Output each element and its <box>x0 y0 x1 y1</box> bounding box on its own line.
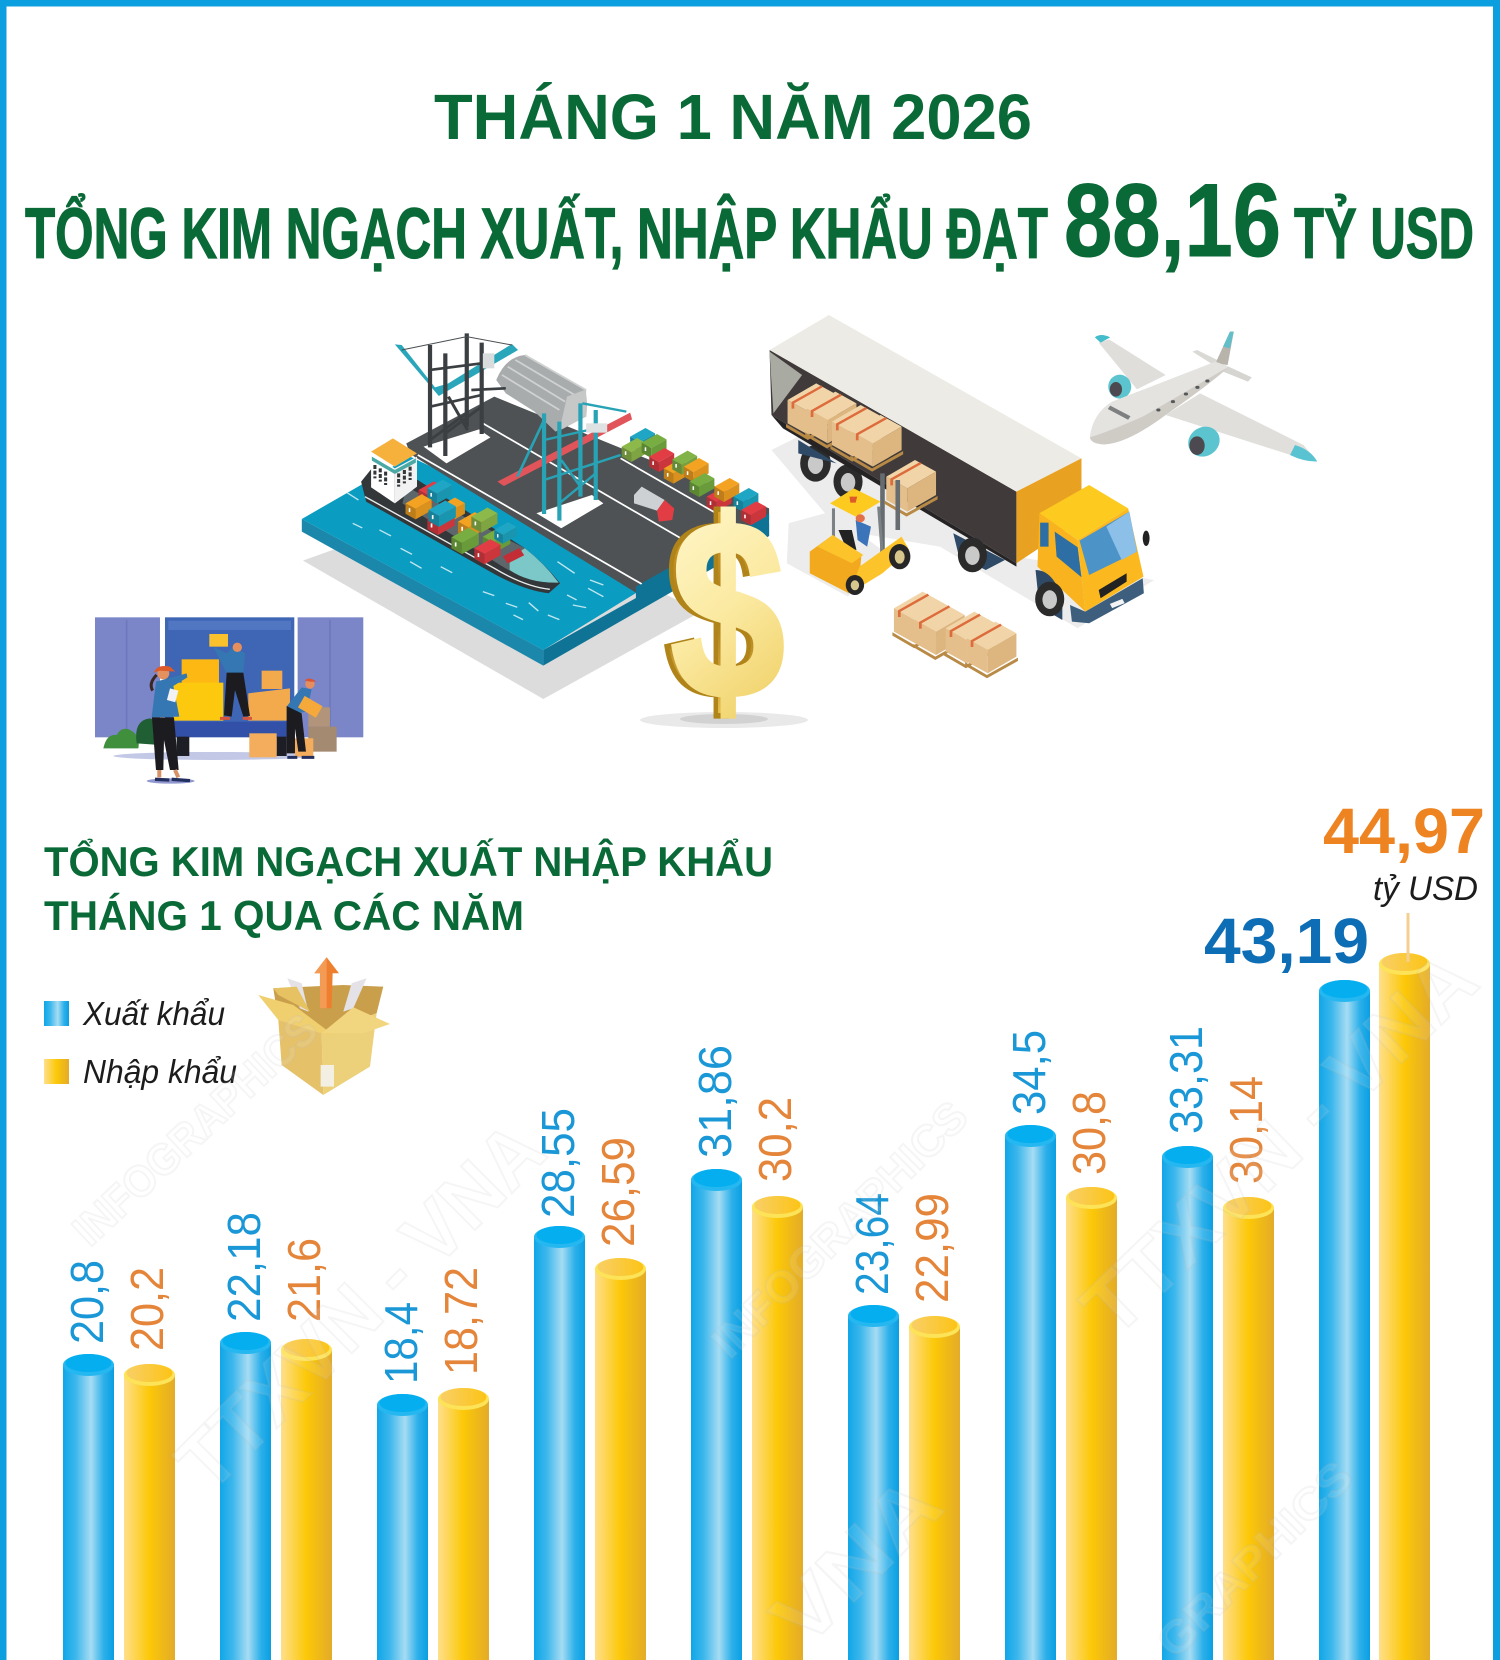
connector line <box>1406 913 1410 962</box>
bar chart <box>61 795 1485 1660</box>
dark crane <box>424 429 490 463</box>
icon: gold dollar sign: $ <box>664 468 777 751</box>
year group 3 <box>375 1267 489 1660</box>
legend swatch: export <box>44 1001 69 1026</box>
watermark: VNA <box>754 1459 958 1660</box>
heading line 1: TỔNG KIM NGẠCH XUẤT NHẬP KHẨU <box>44 836 773 885</box>
export value: 22,18 <box>218 1212 270 1322</box>
red boom and teal crane <box>497 413 632 486</box>
year group 4 <box>532 1108 646 1660</box>
watermark: TTXVN - VNA <box>1065 934 1494 1352</box>
export value: 28,55 <box>532 1108 584 1218</box>
import value: 22,99 <box>906 1193 958 1303</box>
year group 7 <box>1003 1030 1117 1660</box>
front rear wheel <box>953 533 1005 570</box>
cargo <box>786 383 839 440</box>
import value: 30,14 <box>1220 1076 1272 1184</box>
year group 2 <box>218 1212 332 1660</box>
man on truck <box>209 634 228 647</box>
export bar <box>377 1394 428 1660</box>
watermark <box>63 934 1494 1660</box>
export value: 31,86 <box>689 1045 741 1158</box>
export bar <box>848 1305 899 1660</box>
year group 5 <box>689 1045 803 1660</box>
illustration: workers unloading truck <box>95 617 363 784</box>
export bar <box>534 1226 585 1660</box>
export value: 33,31 <box>1160 1026 1212 1134</box>
man right <box>305 679 315 689</box>
import value: 18,72 <box>435 1267 487 1375</box>
shore containers <box>630 428 655 452</box>
watermark: INFOGRAPHICS <box>63 1005 327 1255</box>
chart heading <box>44 836 773 939</box>
cab <box>1039 485 1128 540</box>
import bar <box>752 1196 803 1660</box>
legend label: export: Xuất khẩu <box>82 995 225 1032</box>
import bar <box>1379 953 1430 1660</box>
icon: gold dollar sign <box>640 468 808 751</box>
import value: 21,6 <box>278 1238 330 1322</box>
legend <box>44 995 237 1090</box>
export bar <box>1162 1146 1213 1660</box>
import bar <box>438 1388 489 1660</box>
import bar <box>909 1316 960 1660</box>
watermark: INFOGRAPHICS <box>702 1092 977 1367</box>
boxes <box>182 659 219 683</box>
import bar <box>1223 1197 1274 1660</box>
hangar <box>496 355 587 432</box>
export bar <box>1005 1125 1056 1660</box>
import bar <box>124 1364 175 1660</box>
icon: open cardboard box <box>258 957 390 1095</box>
export value: 23,64 <box>846 1193 898 1295</box>
icon: gold dollar sign: $ <box>671 468 784 751</box>
import value: 30,2 <box>749 1097 801 1182</box>
import value: 20,2 <box>121 1267 173 1351</box>
export value: 20,8 <box>61 1260 113 1344</box>
title line 1: THÁNG 1 NĂM 2026 <box>434 81 1032 153</box>
import bar <box>595 1258 646 1660</box>
year group 6 <box>846 1193 960 1660</box>
legend label: import: Nhập khẩu <box>83 1053 237 1090</box>
shadows <box>771 437 1154 628</box>
import value highlight: 44,97 <box>1323 795 1485 867</box>
year group 9 <box>1204 795 1485 1660</box>
wheels rear <box>800 445 831 482</box>
forklift <box>882 473 898 557</box>
export value highlight: 43,19 <box>1204 905 1369 977</box>
woman <box>157 667 169 679</box>
import value: 26,59 <box>592 1137 644 1247</box>
unit label: tỷ USD <box>1373 870 1478 908</box>
import bar <box>1066 1187 1117 1660</box>
watermark: TTXVN - VNA <box>159 1105 561 1507</box>
legend swatch: import <box>44 1059 69 1084</box>
illustration: truck, forklift and pallets <box>770 315 1154 678</box>
illustration: airplane <box>1090 332 1317 462</box>
export bar <box>1319 980 1370 1660</box>
export bar <box>691 1169 742 1660</box>
headline figure: 88,16 <box>1064 163 1281 279</box>
title <box>25 81 1474 279</box>
illustration: container port <box>302 333 769 699</box>
year group 8 <box>1160 1026 1274 1660</box>
import bar <box>281 1339 332 1660</box>
title line 2: TỔNG KIM NGẠCH XUẤT, NHẬP KHẨU ĐẠT <box>25 194 1048 274</box>
export bar <box>63 1354 114 1660</box>
heading line 2: THÁNG 1 QUA CÁC NĂM <box>44 892 524 939</box>
ship <box>361 468 560 593</box>
import value: 30,8 <box>1063 1091 1115 1175</box>
pallets on ground <box>892 592 945 648</box>
mini truck <box>634 487 665 511</box>
export value: 18,4 <box>375 1302 427 1384</box>
export bar <box>220 1332 271 1660</box>
year group 1 <box>61 1260 175 1660</box>
trailer <box>770 350 1016 563</box>
export value: 34,5 <box>1003 1030 1055 1115</box>
